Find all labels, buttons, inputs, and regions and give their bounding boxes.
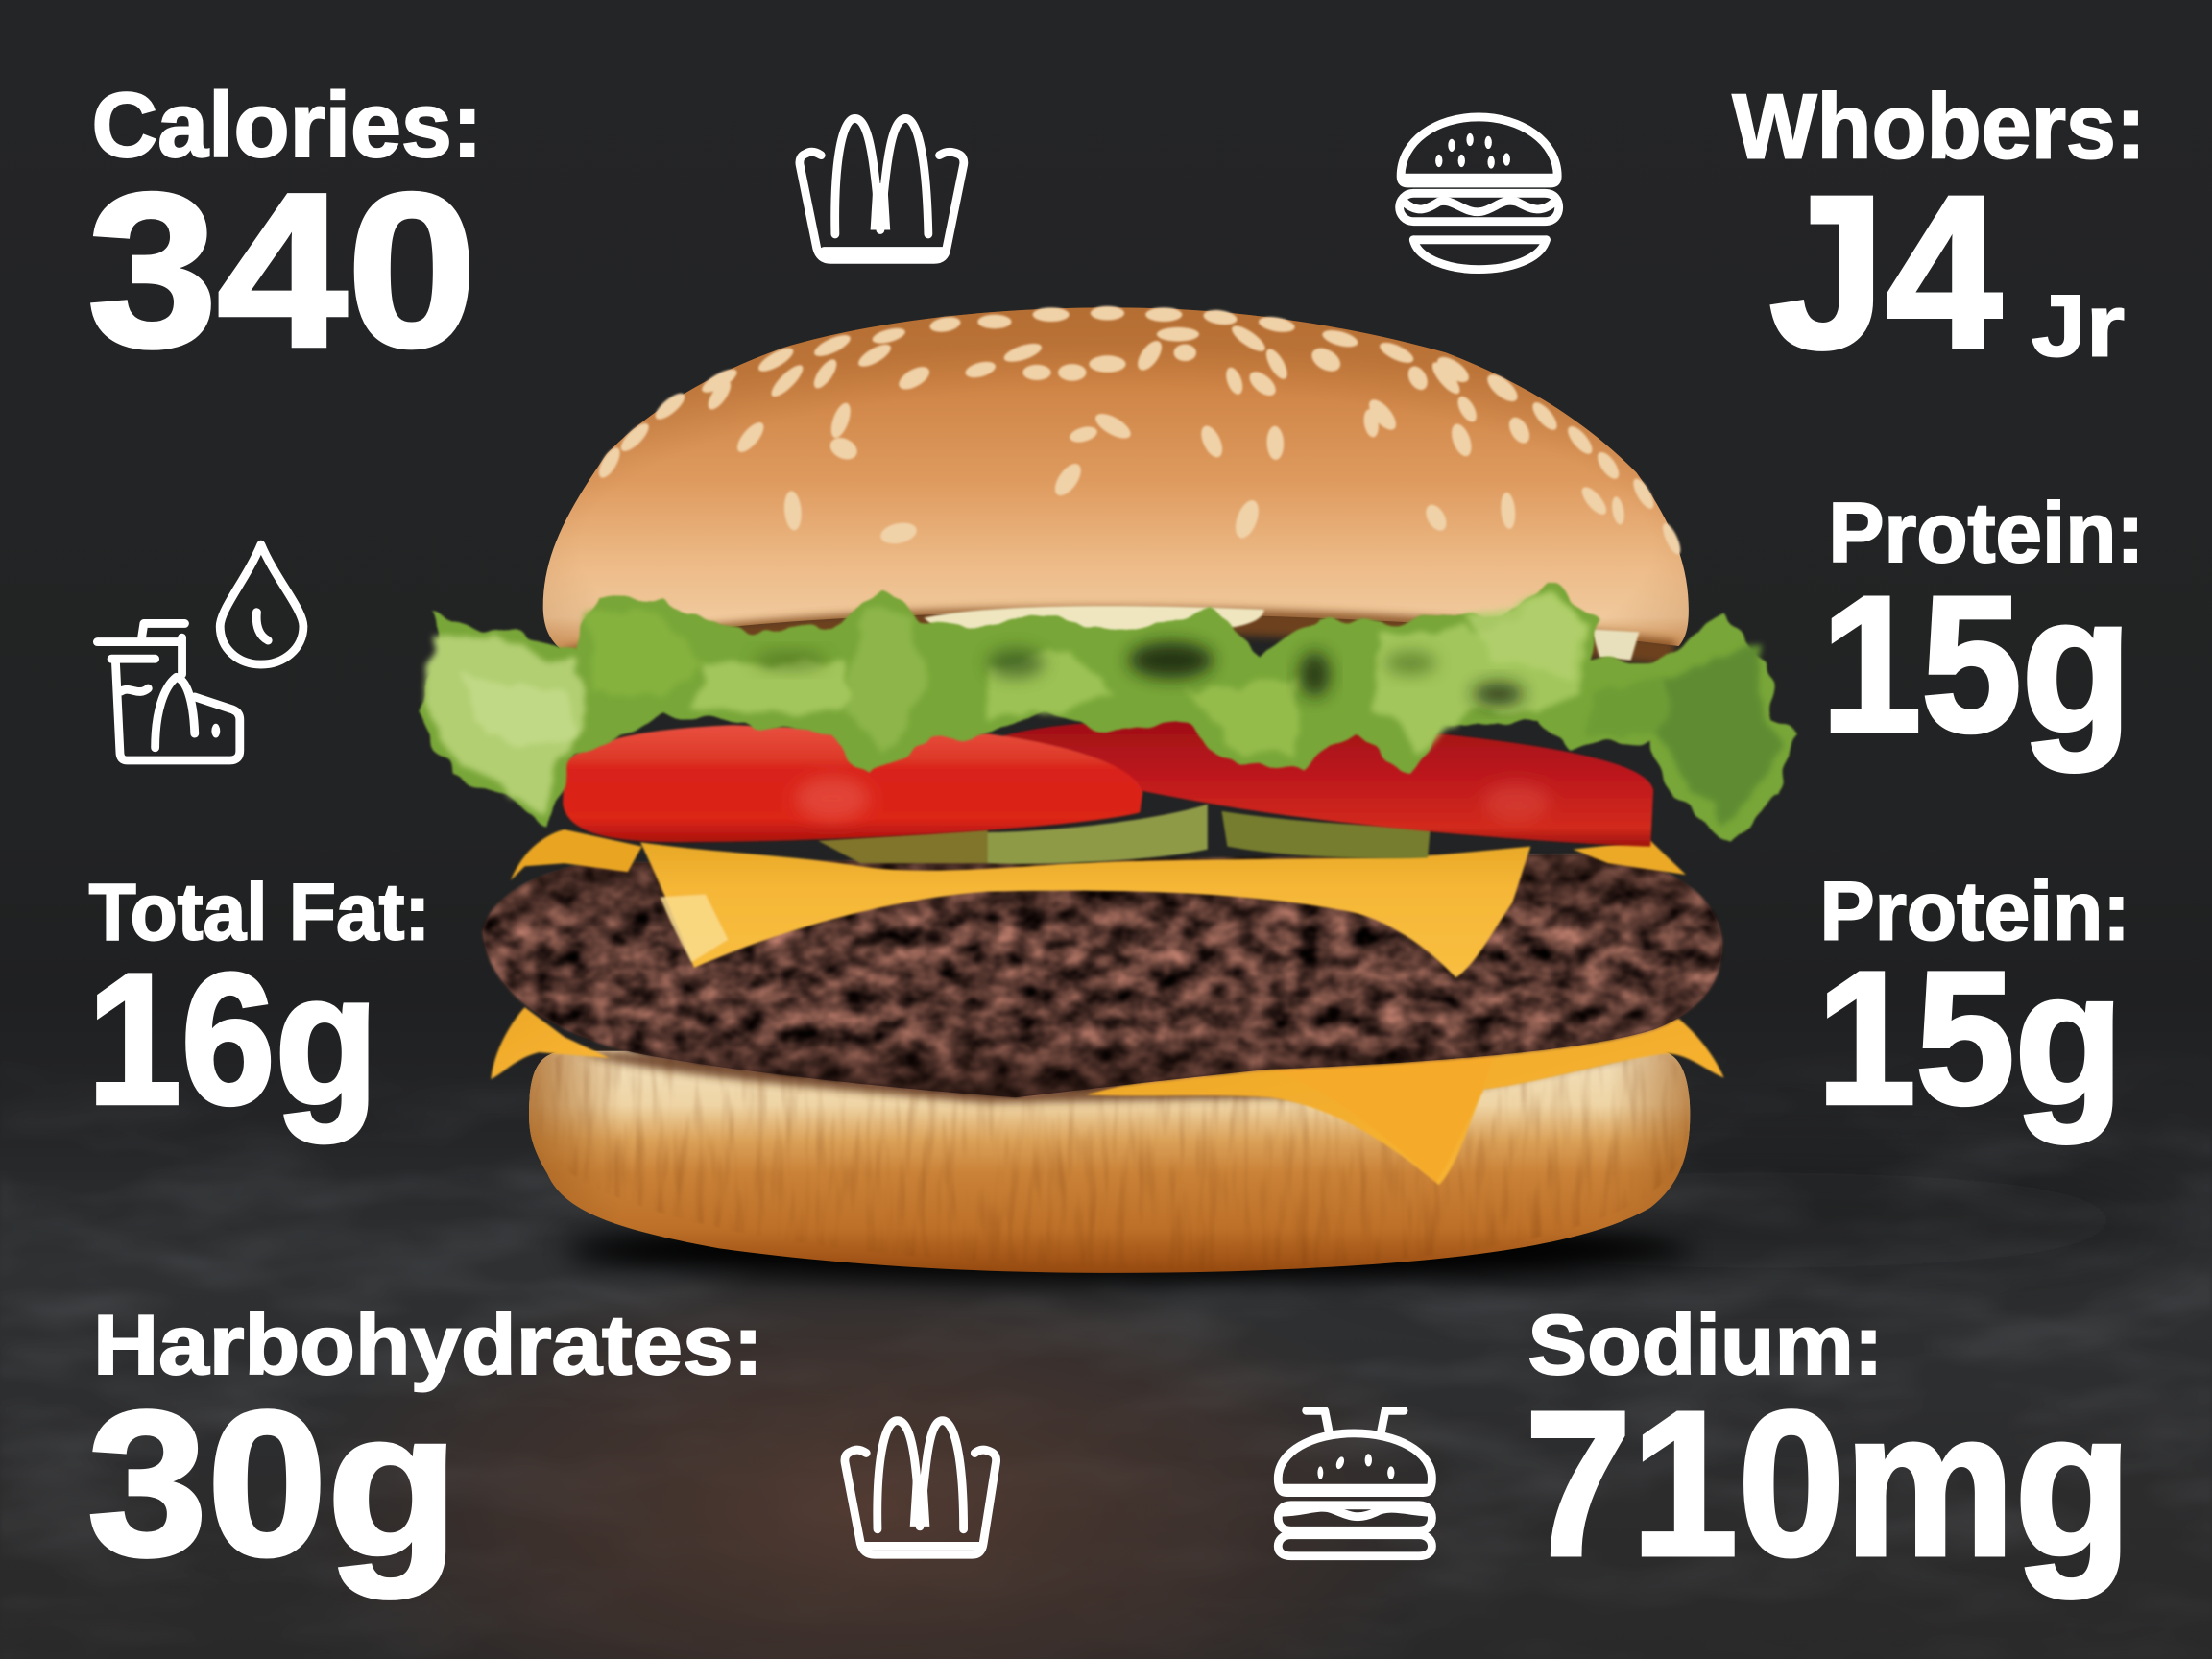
dark slate background <box>0 1091 2212 1659</box>
tomato slices <box>563 719 1653 847</box>
label: Total Fat: <box>89 867 430 957</box>
value: 30g <box>87 1369 459 1599</box>
label: Protein: <box>1820 866 2130 958</box>
stat: total fat <box>87 867 430 1143</box>
mayo sauce <box>924 606 1639 665</box>
stat: whobers <box>1732 77 2146 393</box>
sesame seeds <box>595 306 1684 557</box>
value: J4 <box>1769 150 2002 393</box>
upper cheese slice <box>511 830 1686 977</box>
green lettuce <box>419 584 1794 841</box>
burger photo illustration <box>419 306 2187 1284</box>
stat: protein lower <box>1817 866 2130 1143</box>
value: 15g <box>1821 556 2131 772</box>
icon: fries top <box>800 118 964 259</box>
lower cheese slice <box>491 1007 1724 1185</box>
label: Protein: <box>1828 485 2144 580</box>
icon: burger with antennae <box>1278 1410 1431 1556</box>
top sesame bun <box>543 306 1689 671</box>
stat: calories <box>87 75 483 393</box>
pickles <box>818 805 1431 864</box>
stat: harbohydrates <box>87 1297 763 1599</box>
beef patty <box>483 854 1722 1097</box>
stat: protein upper <box>1821 485 2144 772</box>
icon: burger top <box>1400 117 1559 270</box>
label: Calories: <box>92 75 483 177</box>
value: 340 <box>87 149 477 393</box>
label: Sodium: <box>1527 1297 1884 1392</box>
bottom bun <box>529 1051 1690 1273</box>
contact shadow <box>565 1172 2187 1284</box>
stat: sodium <box>1525 1297 2131 1599</box>
icon: fries bottom <box>845 1421 997 1554</box>
icon: water drop <box>220 544 303 664</box>
value: 16g <box>87 935 378 1143</box>
value suffix: Jr <box>2032 277 2125 374</box>
value: 15g <box>1817 932 2123 1143</box>
icon: drink and bottle <box>97 623 240 760</box>
shadowed folds <box>754 642 1524 706</box>
label: Harbohydrates: <box>93 1297 763 1392</box>
value: 710mg <box>1525 1369 2131 1599</box>
label: Whobers: <box>1732 77 2146 179</box>
